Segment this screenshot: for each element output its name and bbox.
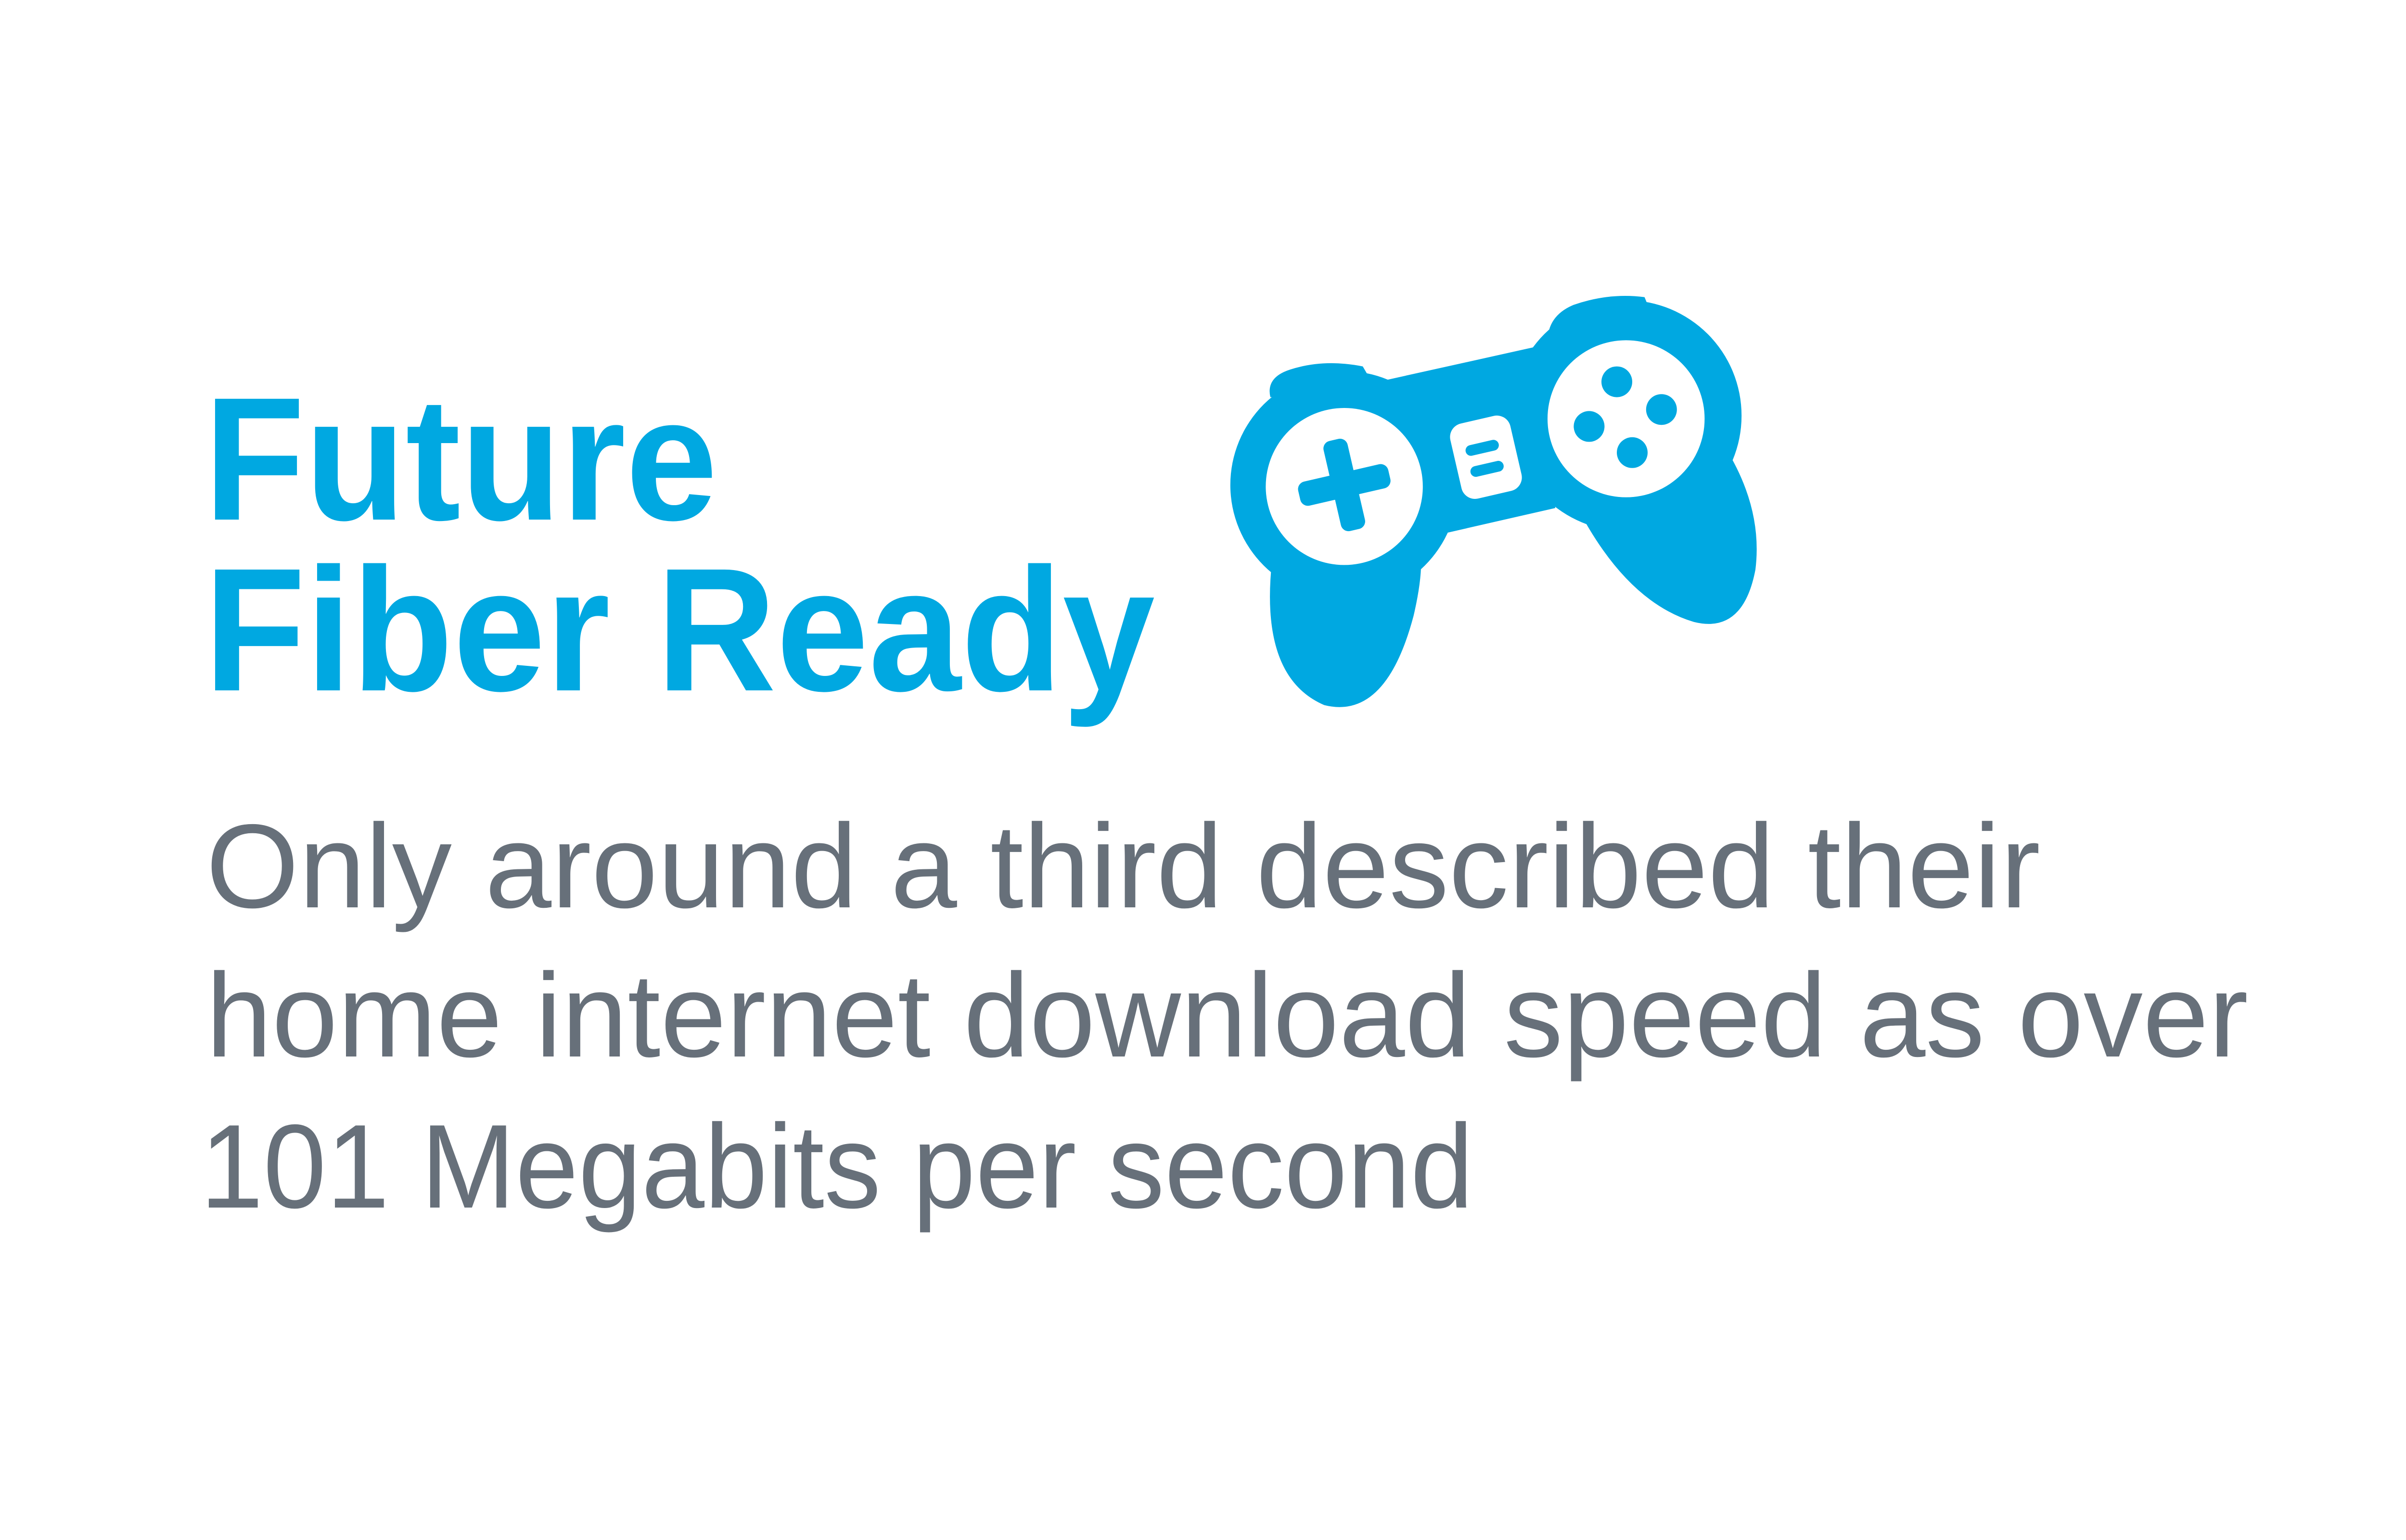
body text (200, 799, 2248, 1233)
body text: home internet download speed as over (206, 948, 2248, 1082)
center plate (1447, 413, 1524, 502)
title: Future (204, 361, 717, 557)
right handle (1586, 446, 1757, 624)
body text: Only around a third described their (206, 799, 2040, 933)
left handle (1270, 547, 1421, 707)
d-pad (1289, 430, 1400, 540)
icon: game controller (1230, 296, 1757, 707)
body text: 101 Megabits per second (200, 1099, 1473, 1233)
title (204, 361, 1156, 729)
bumpers (1269, 363, 1373, 397)
body (1378, 345, 1555, 533)
buttons (1574, 367, 1677, 468)
title: Fiber Ready (204, 532, 1156, 729)
